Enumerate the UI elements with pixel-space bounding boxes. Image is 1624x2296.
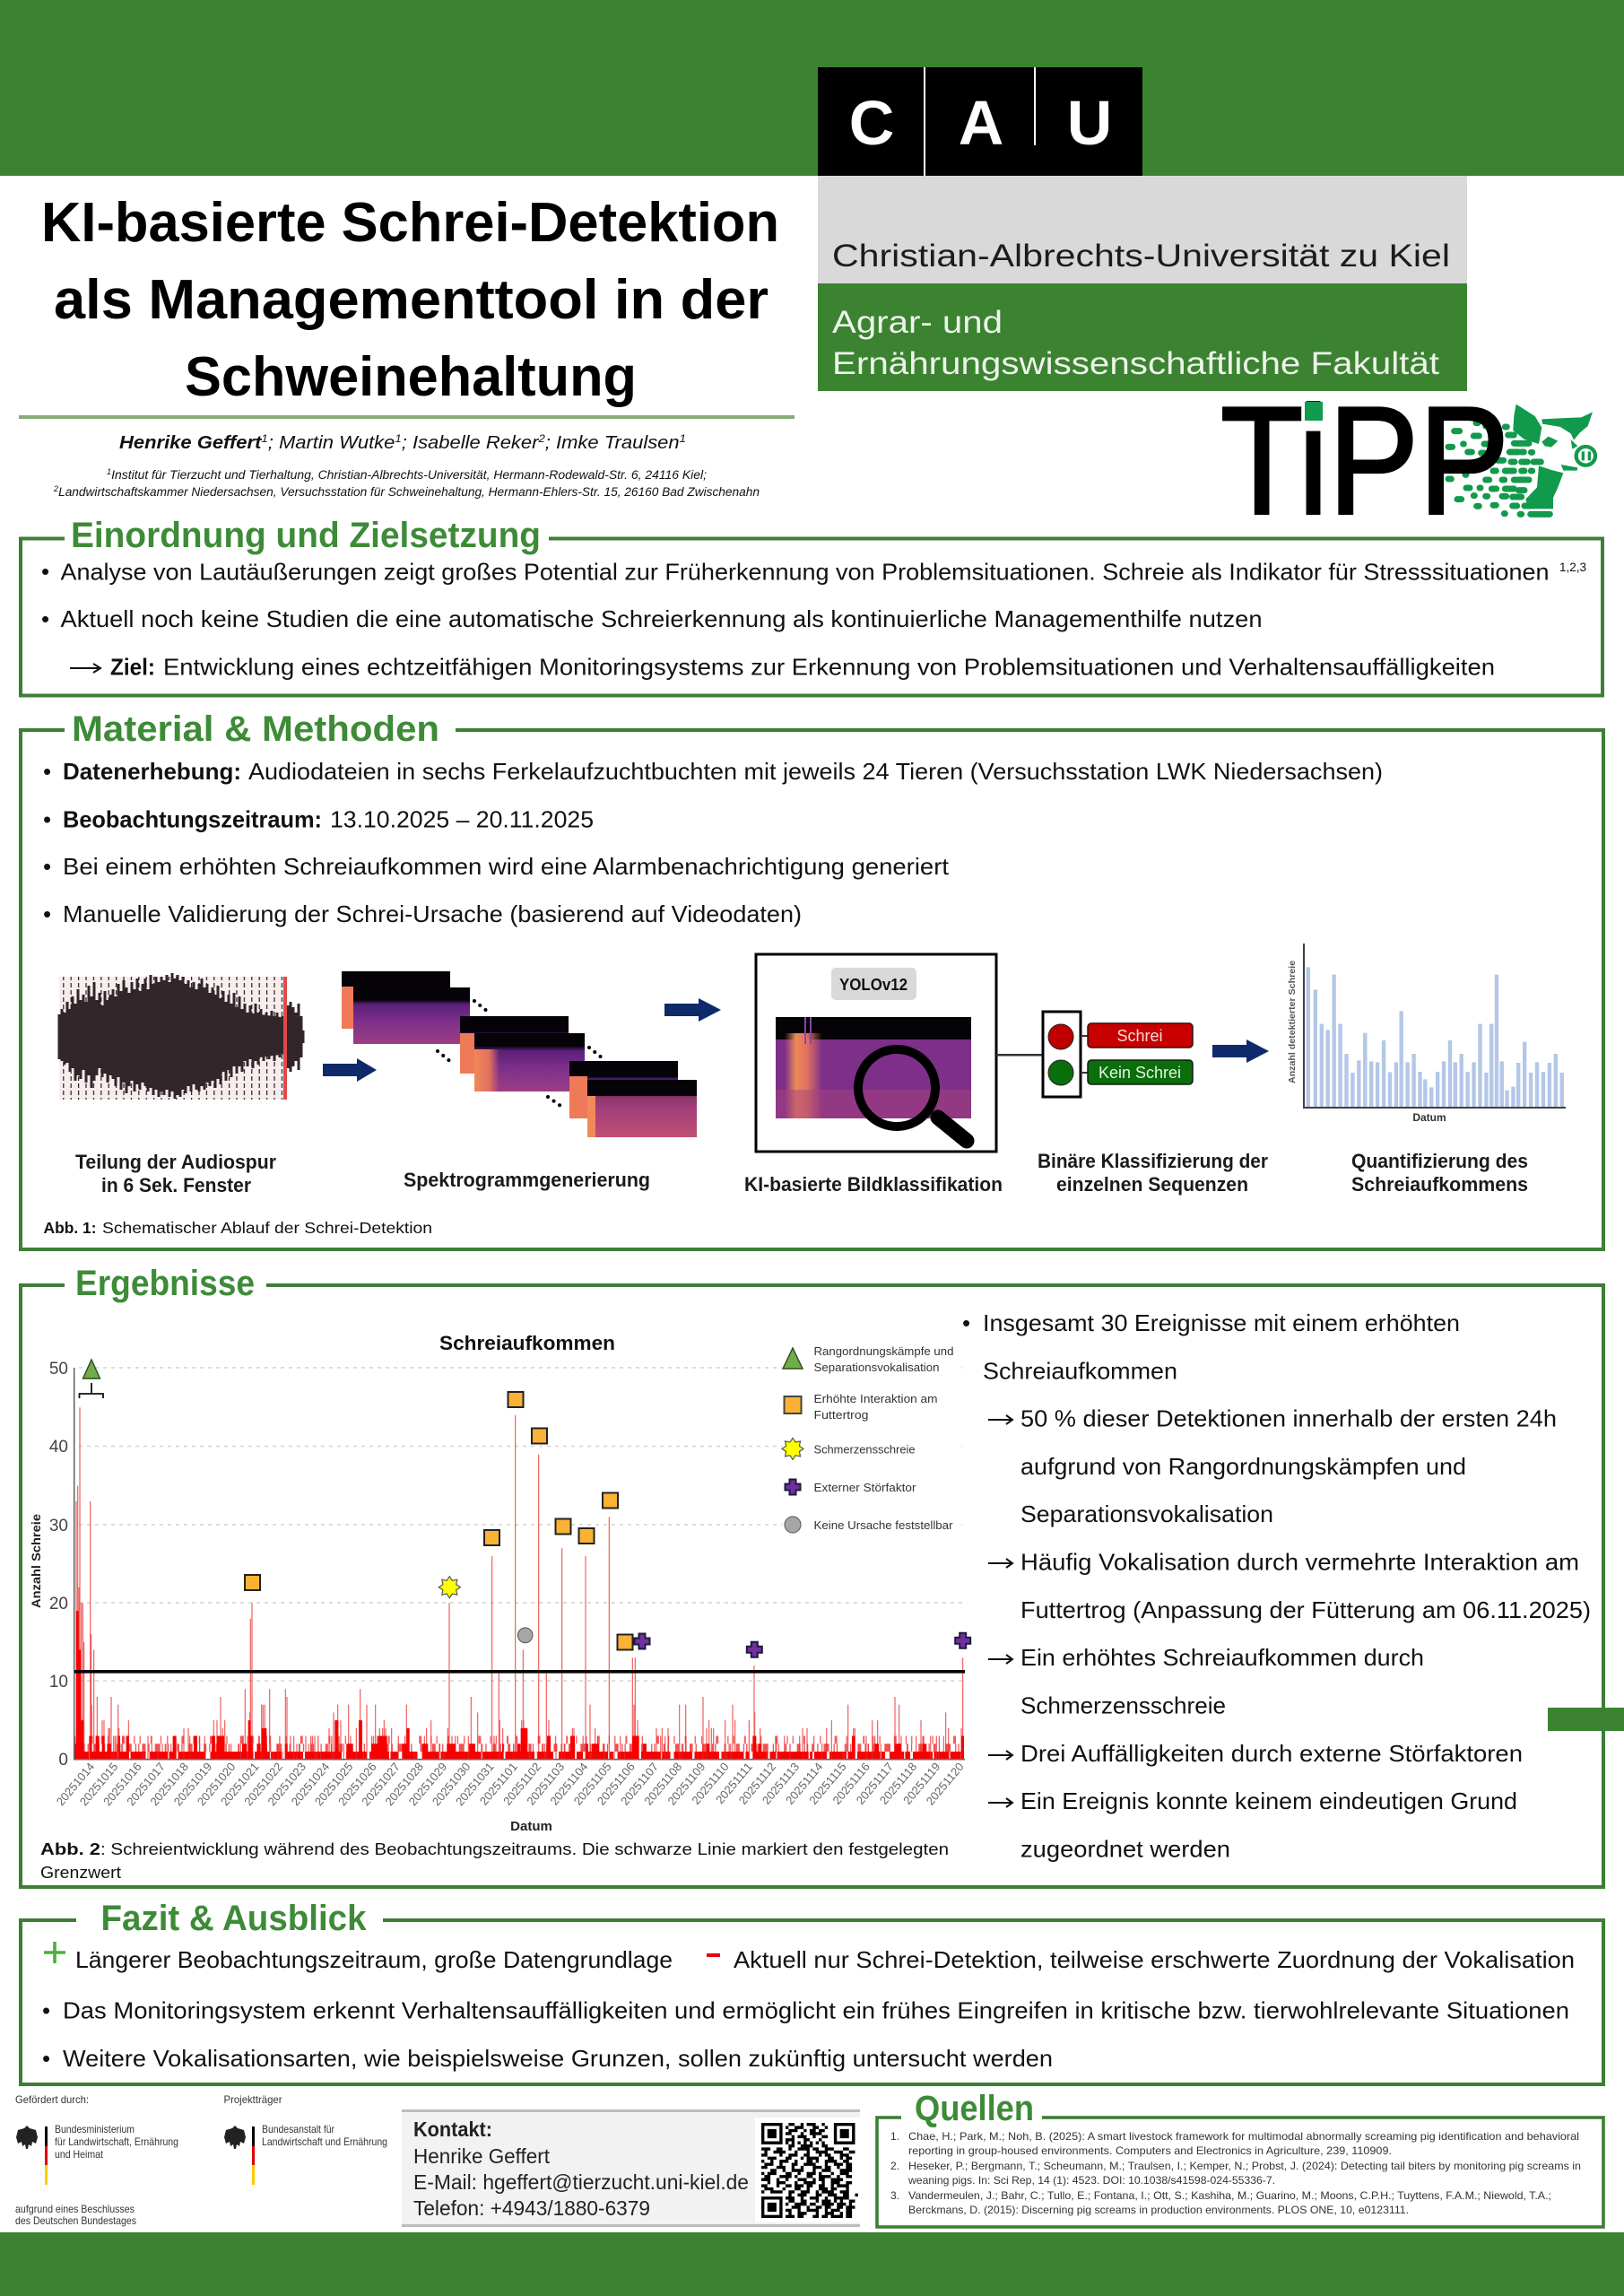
y axis labels: 40 xyxy=(49,1438,68,1457)
date labels: 20251116 xyxy=(829,1760,873,1807)
conclusion bullets xyxy=(42,1996,1569,2072)
con text: Aktuell nur Schrei-Detektion, teilweise erschwerte Zuordnung der Vokalisation xyxy=(734,1946,1575,1973)
results text: Separationsvokalisation xyxy=(1020,1500,1273,1527)
caption Abb. 2: : Schreientwicklung während des Beobachtungszeitraums. Die schwarze Linie markiert den festgelegten xyxy=(100,1839,949,1858)
accent bar at right edge xyxy=(1548,1708,1624,1731)
legend: Rangordnungskämpfe und xyxy=(814,1344,954,1358)
marker: unknown cause xyxy=(517,1628,533,1643)
bullet text xyxy=(41,558,1586,632)
caption Abb. 1: Schematischer Ablauf der Schrei-Detektion xyxy=(102,1219,432,1237)
bullet text: Analyse von Lautäußerungen zeigt großes Potential zur Früherkennung von Problemsituationen. Schreie als Indikator für Stresssituationen xyxy=(61,558,1550,585)
method bullets: • xyxy=(43,805,51,832)
flag stripe xyxy=(252,2126,255,2185)
date labels: 20251022 xyxy=(241,1760,285,1808)
icon: magnifier xyxy=(858,1049,967,1141)
results text xyxy=(962,1309,1591,1862)
footer band xyxy=(0,2232,1624,2296)
date labels xyxy=(54,1760,967,1808)
date labels: 20251023 xyxy=(265,1760,308,1808)
method bullets: Beobachtungszeitraum: xyxy=(63,805,322,832)
affiliations: 1 xyxy=(107,467,111,476)
method bullets: Datenerhebung: xyxy=(63,758,241,785)
authors: ; Imke Traulsen xyxy=(545,433,680,453)
bullet text: Aktuell noch keine Studien die eine automatische Schreierkennung als kontinuierliche Managementhilfe nutzen xyxy=(61,605,1263,632)
authors: Henrike Geffert xyxy=(119,433,263,453)
conclusion bullets: • xyxy=(42,1996,50,2023)
results text: Häufig Vokalisation durch vermehrte Interaktion am xyxy=(1020,1548,1579,1575)
date labels: 20251114 xyxy=(783,1760,825,1807)
mini bar chart: Anzahl detektierter Schreie xyxy=(1288,961,1298,1083)
date labels: 20251027 xyxy=(359,1760,403,1808)
legend: Schmerzensschreie xyxy=(814,1442,915,1457)
authors: 1 xyxy=(395,432,402,445)
faculty panel xyxy=(818,283,1467,391)
funding block: BMLEH xyxy=(15,2093,178,2227)
date labels: 20251017 xyxy=(124,1760,168,1808)
date labels: 20251118 xyxy=(877,1760,919,1807)
pro text: Längerer Beobachtungszeitraum, große Datengrundlage xyxy=(75,1946,673,1973)
method bullets: • xyxy=(43,900,51,927)
chart: Schreiaufkommen xyxy=(29,1332,970,1834)
chart title: Schreiaufkommen xyxy=(439,1332,615,1354)
classifier box xyxy=(756,954,996,1152)
contact text: E-Mail: hgeffert@tierzucht.uni-kiel.de xyxy=(413,2170,749,2194)
contact text xyxy=(413,2118,749,2220)
date labels: 20251104 xyxy=(547,1760,590,1807)
waveform xyxy=(59,973,303,1100)
reference list: 2. xyxy=(890,2160,899,2172)
date labels: 20251115 xyxy=(806,1760,849,1807)
title xyxy=(41,192,779,408)
legend: Keine Ursache feststellbar xyxy=(814,1518,953,1532)
logo: CAU xyxy=(818,67,1142,176)
reference list: reporting in group-housed environments. Computers and Electronics in Agriculture, 239, 110909. xyxy=(908,2144,1392,2157)
step captions xyxy=(75,1150,1528,1196)
threshold line xyxy=(74,1670,965,1674)
marker: pain scream xyxy=(439,1577,460,1598)
caption Abb. 2 xyxy=(40,1839,949,1882)
date labels: 20251026 xyxy=(335,1760,379,1808)
y axis labels: 20 xyxy=(49,1595,68,1613)
date labels: 20251106 xyxy=(595,1760,638,1807)
funding block: BMLEH: des Deutschen Bundestages xyxy=(15,2214,136,2227)
step captions: Quantifizierung des xyxy=(1351,1150,1528,1172)
funding block: BMLEH: und Heimat xyxy=(55,2148,104,2161)
date labels: 20251111 xyxy=(713,1760,755,1806)
title: Schweinehaltung xyxy=(185,346,637,408)
date labels: 20251102 xyxy=(500,1760,543,1807)
YOLO tag xyxy=(831,968,916,1000)
faculty panel: Agrar- und xyxy=(832,305,1003,340)
contact panel xyxy=(402,2109,860,2227)
heading: Fazit & Ausblick xyxy=(100,1899,367,1938)
reference list: 1. xyxy=(890,2130,899,2143)
title: KI-basierte Schrei-Detektion xyxy=(41,192,779,254)
contact text: Telefon: +4943/1880-6379 xyxy=(413,2196,650,2220)
y axis title: Anzahl Schreie xyxy=(29,1514,43,1608)
faculty panel: Ernährungswissenschaftliche Fakultät xyxy=(832,346,1439,381)
mini bar chart: Datum xyxy=(1412,1111,1446,1124)
date labels: 20251018 xyxy=(147,1760,191,1808)
date labels: 20251025 xyxy=(312,1760,355,1808)
y axis labels: 10 xyxy=(49,1673,68,1692)
label: Schrei xyxy=(1088,1023,1193,1048)
method bullets: • xyxy=(43,758,51,785)
legend: Futtertrog xyxy=(814,1408,868,1422)
markers: feeder interaction xyxy=(245,1392,633,1650)
authors: ; Martin Wutke xyxy=(268,433,395,453)
step captions: Teilung der Audiospur xyxy=(75,1151,276,1173)
method bullets: • xyxy=(43,853,51,880)
date labels: 20251112 xyxy=(736,1760,778,1807)
x axis title: Datum xyxy=(510,1819,552,1834)
date labels: 20251021 xyxy=(218,1760,262,1808)
heading: Material & Methoden xyxy=(72,709,439,749)
date labels: 20251109 xyxy=(664,1760,708,1807)
method bullets: 13.10.2025 – 20.11.2025 xyxy=(330,805,594,832)
label: Kein Schrei: Kein Schrei xyxy=(1099,1064,1181,1082)
authors: 2 xyxy=(537,432,545,445)
date labels: 20251016 xyxy=(100,1760,144,1808)
reference list: 3. xyxy=(890,2189,899,2202)
results text: 50 % dieser Detektionen innerhalb der ersten 24h xyxy=(1020,1405,1557,1431)
funding block: BMLEH: Bundesministerium xyxy=(55,2123,135,2135)
reference list xyxy=(890,2130,1581,2216)
date labels: 20251110 xyxy=(689,1760,732,1807)
date labels: 20251107 xyxy=(618,1760,661,1807)
step captions: KI-basierte Bildklassifikation xyxy=(744,1173,1003,1196)
arrow 1 xyxy=(323,1058,377,1082)
results text: Futtertrog (Anpassung der Fütterung am 06.11.2025) xyxy=(1020,1596,1591,1623)
date labels: 20251031 xyxy=(453,1760,497,1808)
legend: Externer Störfaktor xyxy=(814,1481,916,1494)
date labels: 20251030 xyxy=(430,1760,473,1808)
markers: external factor xyxy=(635,1633,970,1657)
arrow 3 xyxy=(1212,1039,1269,1063)
y axis labels: 30 xyxy=(49,1517,68,1535)
panel: Material und Methoden xyxy=(21,709,1603,1249)
axes xyxy=(74,1368,965,1760)
affiliations xyxy=(53,467,760,499)
results text: Drei Auffälligkeiten durch externe Störfaktoren xyxy=(1020,1740,1523,1767)
bars xyxy=(74,1407,965,1760)
university name panel: Christian-Albrechts-Universität zu Kiel xyxy=(832,239,1450,274)
date labels: 20251119 xyxy=(900,1760,942,1807)
date labels: 20251117 xyxy=(854,1760,896,1807)
contact text: Henrike Geffert xyxy=(413,2144,551,2168)
logo: CAU: A xyxy=(959,88,1003,158)
icon: federal eagle xyxy=(16,2126,38,2149)
panel: Quellen xyxy=(877,2089,1603,2227)
reference list: Berckmans, D. (2015): Discerning pig screams in production environments. PLOS ONE, 10, e0123111. xyxy=(908,2204,1409,2216)
result arrows xyxy=(988,1415,1012,1807)
legend: Erhöhte Interaktion am xyxy=(814,1392,938,1405)
results text: Insgesamt 30 Ereignisse mit einem erhöhten xyxy=(983,1309,1460,1336)
conclusion bullets: Das Monitoringsystem erkennt Verhaltensauffälligkeiten und ermöglicht ein frühes Eingreifen in kritische bzw. tierwohlrelevante Situationen xyxy=(63,1996,1569,2023)
spectrogram stack xyxy=(342,971,697,1137)
legend: Separationsvokalisation xyxy=(814,1361,940,1374)
results text: Ein Ereignis konnte keinem eindeutigen Grund xyxy=(1020,1787,1517,1814)
results text: zugeordnet werden xyxy=(1020,1835,1230,1862)
header band xyxy=(0,0,1624,176)
affiliations: Landwirtschaftskammer Niedersachsen, Versuchsstation für Schweinehaltung, Hermann-Ehlers-Str. 15, 26160 Bad Zwischenahn xyxy=(58,485,760,499)
step captions: einzelnen Sequenzen xyxy=(1056,1173,1248,1196)
connector xyxy=(996,1054,1042,1057)
date labels: 20251108 xyxy=(641,1760,684,1807)
arrow 2 xyxy=(664,998,721,1022)
goal text: Ziel: xyxy=(110,653,155,680)
marker: ranking fights xyxy=(79,1360,103,1398)
y axis labels: 0 xyxy=(58,1751,68,1770)
reference list: Vandermeulen, J.; Bahr, C.; Tullo, E.; Fontana, I.; Ott, S.; Kashiha, M.; Guarino, M.; Moons, C.P.H.; Tuyttens, F.A.M.; Niewold, T.A.; xyxy=(908,2189,1551,2202)
binary traffic light xyxy=(1043,1012,1088,1097)
date labels: 20251014 xyxy=(54,1760,97,1808)
results text: Schmerzensschreie xyxy=(1020,1692,1226,1718)
bullet text: • xyxy=(41,558,49,585)
authors: 1 xyxy=(261,432,268,445)
method bullets: Manuelle Validierung der Schrei-Ursache (basierend auf Videodaten) xyxy=(63,900,802,927)
contact text: Kontakt: xyxy=(413,2118,492,2141)
date labels: 20251015 xyxy=(77,1760,120,1808)
date labels: 20251028 xyxy=(382,1760,426,1808)
authors: 1 xyxy=(680,432,686,445)
logo: CAU: C xyxy=(849,88,894,158)
panel: Fazit und Ausblick xyxy=(21,1899,1603,2084)
bullet text: • xyxy=(41,605,49,632)
icon: plus xyxy=(44,1942,65,1963)
funding block: BLE xyxy=(224,2093,387,2185)
heading: Quellen xyxy=(915,2089,1034,2128)
caption Abb. 1: Abb. 1: xyxy=(43,1219,97,1237)
caption Abb. 2: Abb. 2 xyxy=(40,1839,100,1858)
step captions: in 6 Sek. Fenster xyxy=(101,1174,251,1196)
step captions: Spektrogrammgenerierung xyxy=(404,1169,650,1191)
funding block: BLE: Projektträger xyxy=(224,2093,282,2106)
reference list: Heseker, P.; Bergmann, T.; Scheumann, M.; Traulsen, I.; Kemper, N.; Probst, J. (2024): Detecting tail biters by monitoring pig screams in xyxy=(908,2160,1581,2172)
icon: federal eagle xyxy=(224,2126,246,2149)
spectrogram image xyxy=(776,1017,971,1118)
QR code xyxy=(755,2118,860,2222)
conclusion bullets: • xyxy=(42,2045,50,2072)
university name panel xyxy=(818,176,1467,283)
funding block: BLE: Bundesanstalt für xyxy=(262,2123,334,2135)
results text: Schreiaufkommen xyxy=(983,1358,1177,1385)
heading: Einordnung und Zielsetzung xyxy=(71,516,541,555)
results text: Ein erhöhtes Schreiaufkommen durch xyxy=(1020,1644,1424,1671)
flag stripe xyxy=(45,2126,48,2185)
method bullets xyxy=(43,758,1383,927)
reference list: weaning pigs. In: Sci Rep, 14 (1): 4523. DOI: 10.1038/s41598-024-55336-7. xyxy=(908,2174,1275,2187)
affiliations: Institut für Tierzucht und Tierhaltung, Christian-Albrechts-Universität, Hermann-Rodewald-Str. 6, 24116 Kiel; xyxy=(111,468,707,482)
mini bar chart xyxy=(1288,944,1566,1124)
logo: CAU: U xyxy=(1067,88,1112,158)
y axis labels: 50 xyxy=(49,1360,68,1378)
goal text: Entwicklung eines echtzeitfähigen Monitoringsystems zur Erkennung von Problemsituationen und Verhaltensauffälligkeiten xyxy=(163,653,1495,680)
date labels: 20251105 xyxy=(571,1760,614,1807)
date labels: 20251113 xyxy=(760,1760,802,1807)
panel: Ergebnisse xyxy=(21,1264,1603,1887)
date labels: 20251029 xyxy=(406,1760,449,1808)
results text: aufgrund von Rangordnungskämpfen und xyxy=(1020,1453,1466,1480)
step captions: Schreiaufkommens xyxy=(1351,1173,1528,1196)
affiliations: 2 xyxy=(53,484,58,493)
legend xyxy=(782,1342,961,1537)
funding block: BMLEH: Gefördert durch: xyxy=(15,2093,89,2106)
reference list: Chae, H.; Park, M.; Noh, B. (2025): A smart livestock framework for multimodal abnormally screaming pig identification and behavioral xyxy=(908,2130,1579,2143)
y axis labels xyxy=(49,1360,68,1770)
title: als Managementtool in der xyxy=(54,269,769,331)
panel: Einordnung und Zielsetzung xyxy=(21,516,1602,696)
bullet text: 1,2,3 xyxy=(1559,560,1586,574)
logo: TiPP with pig: TiPP xyxy=(1220,375,1509,547)
date labels: 20251103 xyxy=(524,1760,567,1807)
label: Kein Schrei xyxy=(1088,1060,1193,1084)
date labels: 20251120 xyxy=(924,1760,967,1807)
label: Schrei: Schrei xyxy=(1116,1027,1163,1045)
date labels: 20251101 xyxy=(477,1760,520,1807)
authors: ; Isabelle Reker xyxy=(402,433,540,453)
results text: • xyxy=(962,1309,970,1336)
YOLO tag: YOLOv12 xyxy=(839,976,908,994)
funding block: BMLEH: aufgrund eines Beschlusses xyxy=(15,2203,135,2215)
funding block: BMLEH: für Landwirtschaft, Ernährung xyxy=(55,2135,178,2148)
date labels: 20251024 xyxy=(289,1760,332,1808)
funding block: BLE: Landwirtschaft und Ernährung xyxy=(262,2135,387,2148)
arrow: goal xyxy=(70,664,100,673)
conclusion bullets: Weitere Vokalisationsarten, wie beispielsweise Grunzen, sollen zukünftig untersucht werden xyxy=(63,2045,1053,2072)
title divider xyxy=(19,415,795,419)
method bullets: Bei einem erhöhten Schreiaufkommen wird eine Alarmbenachrichtigung generiert xyxy=(63,853,950,880)
caption Abb. 2: Grenzwert xyxy=(40,1863,121,1882)
method bullets: Audiodateien in sechs Ferkelaufzuchtbuchten mit jeweils 24 Tieren (Versuchsstation LWK Niedersachsen) xyxy=(248,758,1383,785)
date labels: 20251019 xyxy=(171,1760,214,1808)
date labels: 20251020 xyxy=(195,1760,238,1808)
icon: minus xyxy=(707,1953,720,1957)
heading: Ergebnisse xyxy=(75,1264,255,1303)
step captions: Binäre Klassifizierung der xyxy=(1038,1150,1268,1172)
